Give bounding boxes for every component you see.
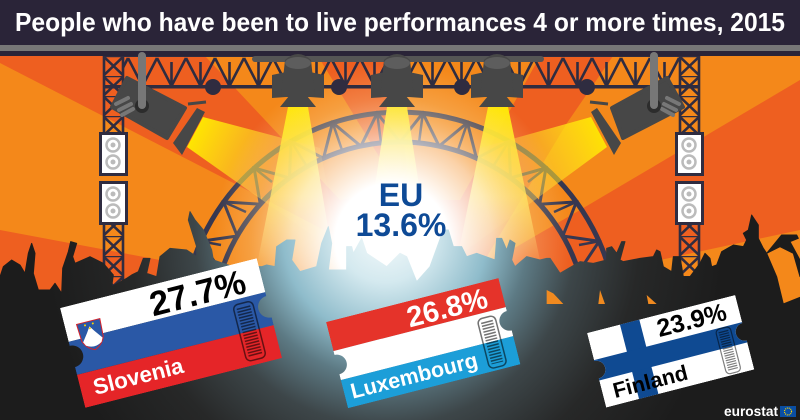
- Luxembourg label: Luxembourg: [348, 348, 480, 404]
- speakers: left tower: [100, 134, 126, 224]
- spotlight: top right: [471, 54, 523, 107]
- Slovenia label: Slovenia: [91, 353, 186, 400]
- barcode: [477, 315, 507, 369]
- ticket: Finland: [587, 295, 754, 408]
- angled spotlight: right: [590, 52, 683, 155]
- ticket: Slovenia: [60, 258, 282, 408]
- EU value: [356, 177, 446, 243]
- Slovenia value: 27.7%: [146, 263, 250, 324]
- barcode: [715, 326, 741, 375]
- light beams: [187, 107, 607, 270]
- EU flag: [780, 406, 796, 417]
- EU value: 13.6%: [356, 207, 446, 243]
- Finland label: Finland: [610, 361, 690, 403]
- Luxembourg value: 26.8%: [404, 283, 491, 334]
- spotlight: top left: [272, 54, 324, 107]
- EU value: EU: [379, 177, 423, 213]
- spotlight: top centre: [371, 54, 423, 107]
- lighting truss rig: [103, 52, 700, 298]
- Finland value: 23.9%: [654, 298, 730, 343]
- barcode: [233, 301, 266, 362]
- lamp hanging bar: [252, 56, 544, 62]
- angled spotlight: left: [112, 52, 206, 155]
- crowd silhouette: [0, 212, 800, 420]
- eurostat logo: eurostat: [724, 404, 779, 419]
- header bar and title: [0, 0, 800, 56]
- central white glow: [150, 56, 650, 356]
- ticket: Luxembourg: [326, 278, 520, 408]
- speakers: right tower: [676, 134, 702, 224]
- stage arch truss: [184, 112, 616, 300]
- Slovenian coat of arms: [77, 319, 107, 353]
